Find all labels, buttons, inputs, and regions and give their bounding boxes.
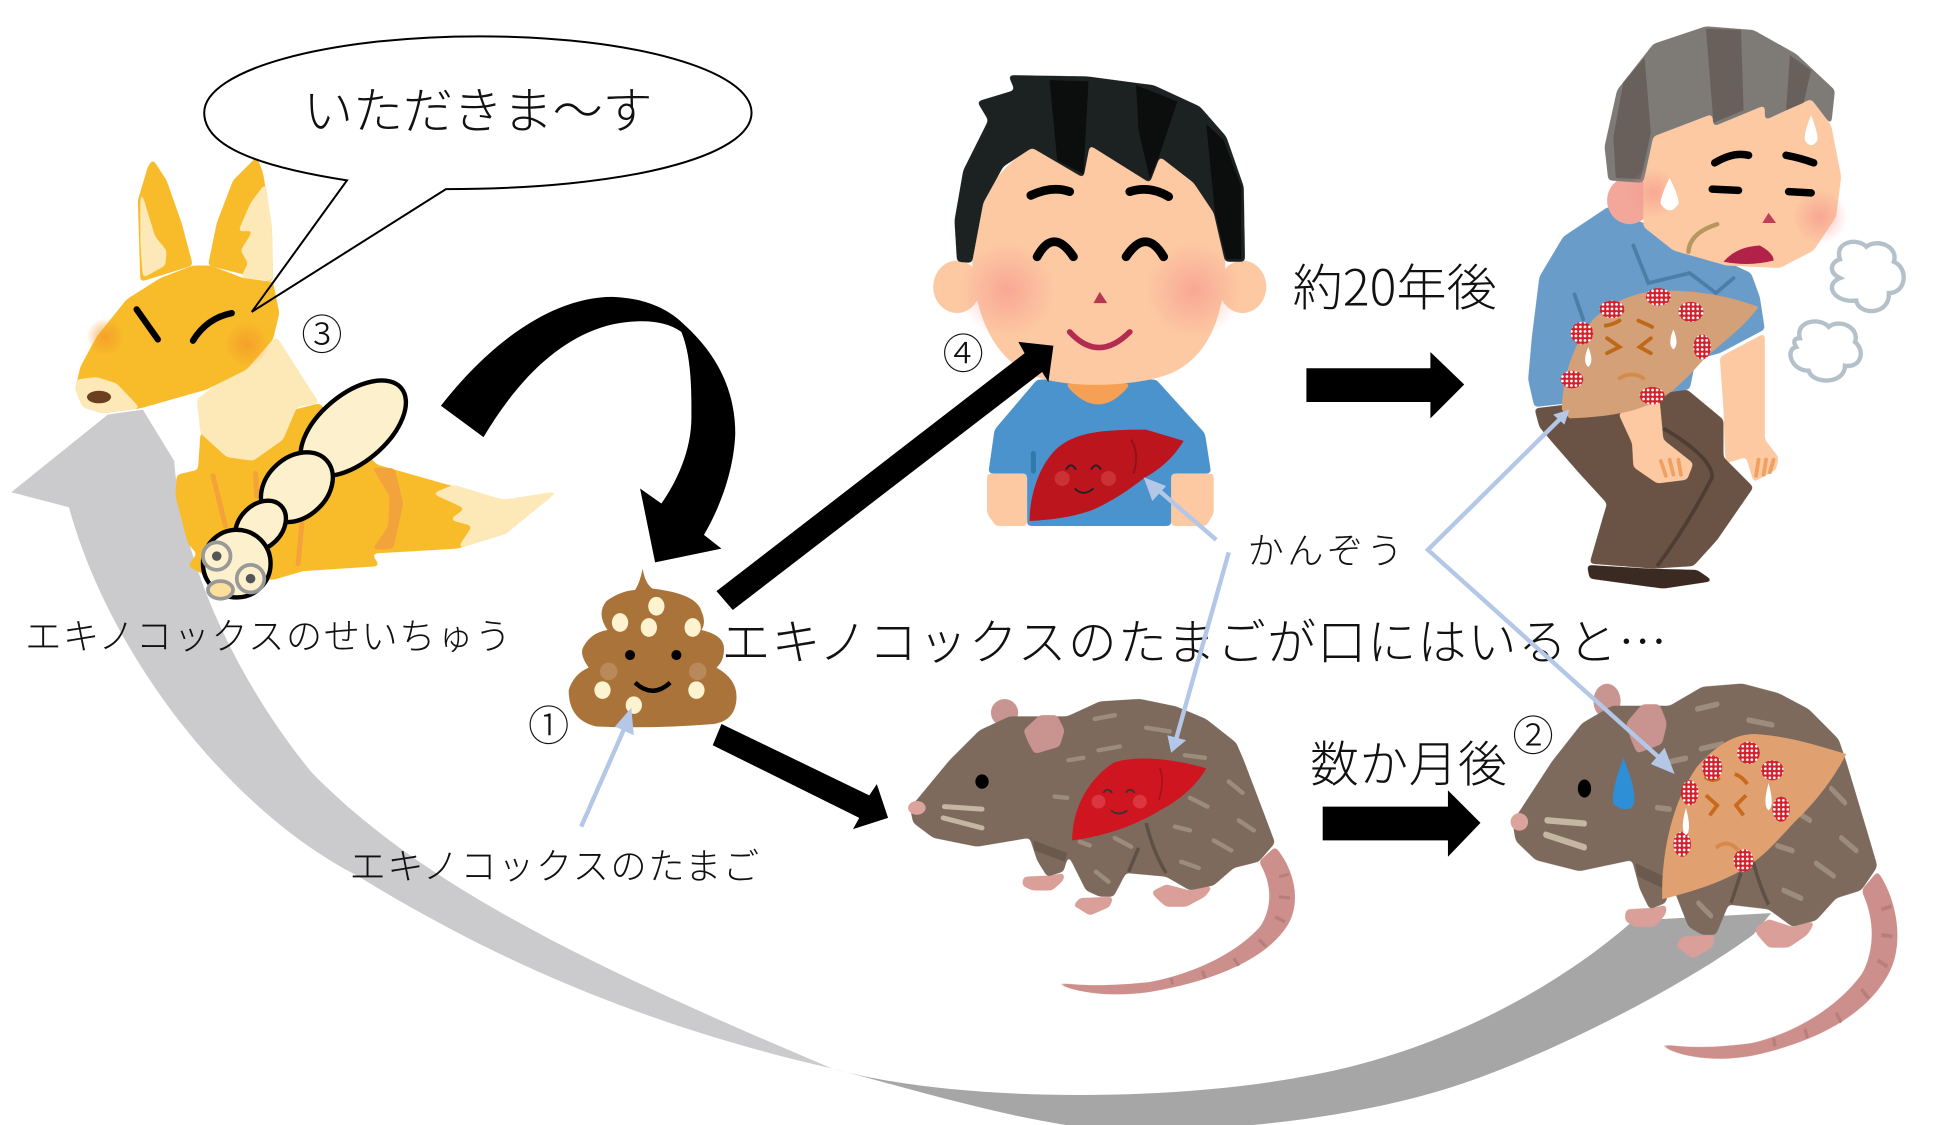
fox (75, 157, 559, 580)
arrow to rat (713, 724, 888, 829)
rat (sick) (1511, 684, 1897, 1059)
man near arm (1618, 400, 1693, 483)
curved gray arrow: rat back to fox (11, 410, 1771, 1125)
man far arm (1720, 333, 1779, 482)
boy mouth (1070, 332, 1130, 348)
poop blush (600, 663, 618, 680)
label: worm: エキノコックスのせいちゅう (25, 616, 511, 657)
man wrinkle (1688, 224, 1717, 252)
fox chest (197, 337, 319, 461)
speech bubble (204, 36, 752, 312)
number 3: ③ (301, 313, 343, 359)
arrow: 20 years (1306, 352, 1464, 418)
man ear (1607, 177, 1652, 224)
man shirt (1528, 207, 1765, 407)
lower breath cloud (1790, 321, 1861, 381)
fox nose (87, 391, 111, 403)
fox leg lines (213, 473, 302, 564)
man hair stripes (1613, 29, 1811, 179)
light part of gray arrow (11, 410, 832, 1068)
healthy liver (1030, 430, 1184, 521)
man nose (1762, 213, 1776, 223)
suckers (203, 542, 264, 599)
large segment (284, 362, 423, 495)
boy face (972, 132, 1225, 385)
worm head (203, 530, 271, 597)
poop body (569, 569, 737, 727)
label: several months later: 数か月後 (1310, 738, 1507, 792)
label: about 20 years later: 約20年後 (1293, 248, 1497, 320)
man base shapes (1528, 26, 1841, 589)
fox cheeks (86, 318, 124, 356)
boy hair stripes (1050, 80, 1241, 259)
rat (healthy) (908, 699, 1295, 994)
boy hair (954, 75, 1245, 263)
boy shirt (988, 380, 1211, 526)
boy arms (987, 473, 1214, 526)
main caption: エキノコックスのたまごが口にはいると… (721, 603, 1667, 674)
fox head (75, 266, 279, 413)
label: eggs: エキノコックスのたまご (349, 846, 759, 887)
poop with eggs (569, 569, 737, 727)
sleeve crease (1031, 453, 1035, 471)
boy base shapes (933, 75, 1266, 526)
man trousers (1534, 390, 1754, 569)
eggs (594, 597, 705, 714)
boy (933, 75, 1266, 526)
number 2: ② (1512, 713, 1554, 759)
rat liver (1072, 758, 1206, 840)
sick rat liver (1662, 734, 1846, 899)
sick old man (1528, 26, 1904, 589)
curved black arrow (441, 297, 735, 562)
man collar and folds (1574, 245, 1734, 319)
fox tail tip (432, 485, 559, 549)
breath clouds (1832, 242, 1904, 311)
arrow: several months (1323, 790, 1481, 857)
man shoes (1587, 565, 1713, 589)
arrow to boy (716, 342, 1053, 610)
man sweat drops (1661, 115, 1818, 210)
number 1: ① (528, 703, 569, 749)
small segment (225, 491, 296, 561)
fox inner ears (140, 183, 273, 281)
fox base shapes (75, 157, 559, 580)
diseased liver (1561, 288, 1759, 418)
boy collar (1065, 383, 1131, 405)
trouser crease (1657, 428, 1712, 566)
man face (1643, 99, 1841, 268)
boy brows (1031, 189, 1169, 197)
dark part of gray arrow (832, 913, 1771, 1125)
boy nose (1093, 292, 1107, 303)
liver pointer arrows (1144, 410, 1675, 774)
fox eyes (137, 309, 232, 341)
egg pointer arrow (581, 708, 634, 827)
fox ears (138, 157, 273, 282)
boy ears (933, 261, 981, 313)
boy eyes (1037, 242, 1164, 257)
sick rat sweat (1613, 758, 1634, 809)
man mouth (1723, 245, 1774, 264)
fox tail stripe (372, 467, 403, 550)
man finger marks (1661, 460, 1774, 476)
middle segment (247, 438, 347, 536)
label: liver: かんぞう (1248, 531, 1403, 572)
speech text: いただきま〜す (303, 83, 653, 139)
poop face (625, 650, 635, 660)
boy cheeks (959, 243, 1055, 338)
man brows and eyes (1712, 154, 1814, 193)
man hair (1605, 26, 1835, 183)
fox body and tail (175, 403, 554, 580)
fox muzzle (75, 377, 140, 413)
tapeworm (203, 362, 423, 599)
man blush (1628, 168, 1678, 218)
number 4: ④ (943, 331, 984, 377)
